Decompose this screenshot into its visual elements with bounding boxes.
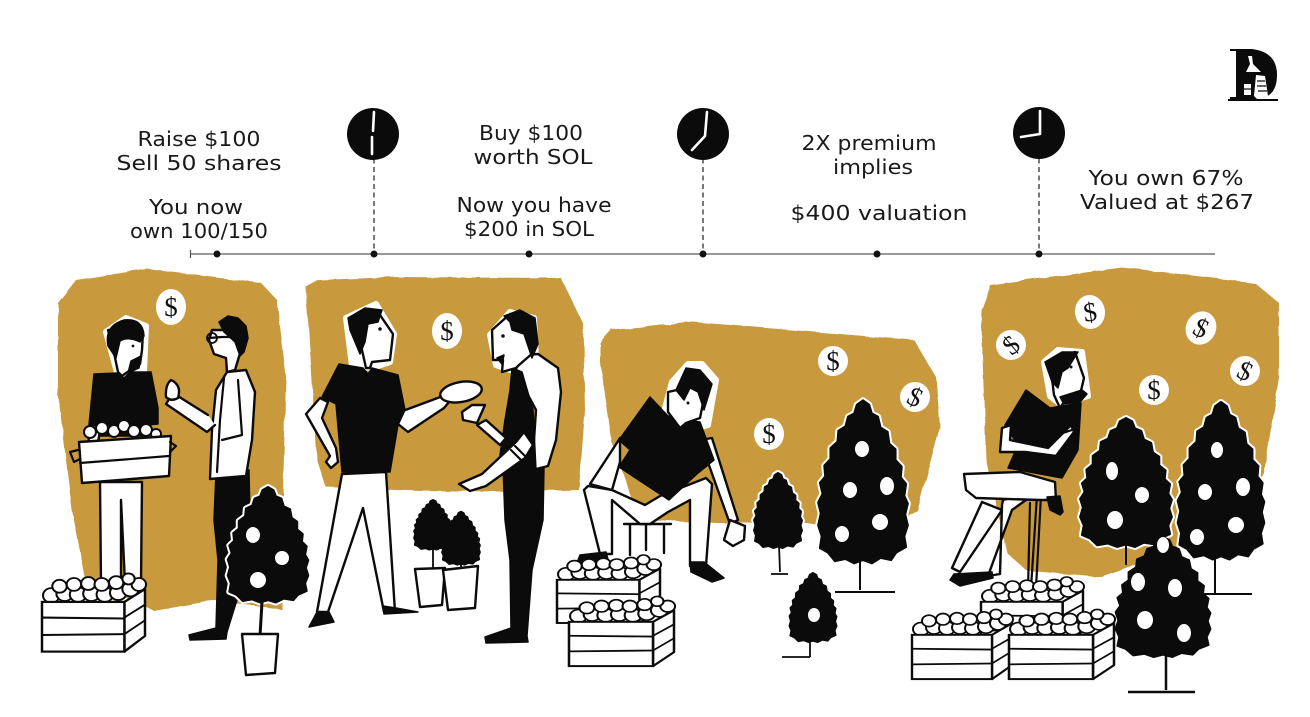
- icon: dollar bubble panel 3 left: [754, 418, 784, 450]
- crate: front left apples panel 4: [912, 609, 1013, 679]
- crate: apples next to panel 1: [42, 573, 146, 652]
- icon: dollar bubble panel 4 upper right: [1180, 306, 1222, 350]
- text: raise step: Raise $100: [138, 127, 260, 151]
- person: man holding crate: [70, 318, 176, 583]
- text: premium step: 2X premium: [802, 131, 936, 155]
- text: raise step: own 100/150: [130, 219, 268, 243]
- icon: dollar bubble panel 4 far right: [1225, 351, 1265, 391]
- text: ownership step: [1080, 166, 1254, 214]
- plant: potted fruit tree panel 1: [228, 487, 308, 675]
- icon: dollar bubble panel 4 left: $: [996, 329, 1026, 361]
- icon: dollar bubble panel 4 top: $: [1081, 296, 1099, 328]
- plant: two potted small trees: [414, 500, 480, 610]
- text: raise step: You now: [148, 195, 243, 219]
- plant: small fruit tree panel 3: [782, 573, 836, 657]
- plant: left fruit tree panel 4: [1080, 418, 1172, 565]
- icon: dollar bubble panel 4 far right: $: [1233, 355, 1257, 387]
- plant: sapling panel 3: [754, 473, 802, 574]
- icon: dollar bubble panel 3 right: $: [903, 381, 927, 413]
- text: premium step: implies: [833, 155, 913, 179]
- icon: dollar bubble panel 4 left: [990, 324, 1032, 366]
- icon: dollar bubble panel 4 top: [1073, 293, 1107, 331]
- text: ownership step: Valued at $267: [1080, 190, 1254, 214]
- crate: rear apples panel 3: [557, 555, 661, 623]
- panel: gold background 1: [58, 269, 286, 611]
- plant: large fruit tree panel 3: [818, 400, 908, 592]
- text: buy step: $200 in SOL: [464, 217, 595, 241]
- crate: rear apples panel 4: [981, 577, 1084, 645]
- icon: clock 1: [347, 108, 399, 160]
- icon: dollar bubble panel 3 top: $: [826, 346, 840, 376]
- text: buy step: worth SOL: [474, 145, 593, 169]
- icon: dollar bubble panel 3 left: $: [762, 419, 776, 449]
- icon: dollar bubble panel 3 top: [818, 346, 848, 376]
- panel: gold background 4: [981, 267, 1279, 577]
- text: raise step: Sell 50 shares: [116, 151, 282, 175]
- icon: dollar bubble panel 4 centre: [1139, 375, 1169, 405]
- plant: right fruit tree panel 4: [1178, 402, 1264, 594]
- text: buy step: Buy $100: [479, 121, 583, 145]
- icon: dollar bubble panel 1: $: [164, 292, 178, 322]
- person: relaxed man with crossed arms on stool: [950, 350, 1088, 590]
- icon: clock 2: [677, 108, 729, 160]
- crate: front apples panel 3: [569, 596, 675, 666]
- icon: dollar bubble panel 4 centre: $: [1147, 375, 1161, 405]
- person: seated man tending sapling: [576, 364, 745, 582]
- icon: clock 3: [1013, 107, 1065, 159]
- person: man with glasses inspecting mango: [166, 316, 255, 640]
- text: premium step: $400 valuation: [790, 201, 968, 225]
- text: buy step: [456, 121, 612, 241]
- icon: dollar bubble panel 3 right: [895, 377, 935, 417]
- icon: publisher logo: [1228, 49, 1278, 100]
- icon: dollar bubble panel 1: [156, 289, 186, 325]
- text: buy step: Now you have: [456, 193, 612, 217]
- icon: dollar bubble panel 2: $: [440, 316, 454, 346]
- icon: dollar bubble panel 4 upper right: $: [1189, 312, 1213, 344]
- plant: front fruit tree panel 4: [1116, 537, 1210, 692]
- text: raise step: [116, 127, 282, 243]
- panel: gold background 3: [600, 322, 940, 535]
- text: ownership step: You own 67%: [1087, 166, 1244, 190]
- person: man with plate and hand on hip: [306, 304, 483, 627]
- icon: dollar bubble panel 2: [432, 313, 462, 349]
- text: premium step: [790, 131, 968, 225]
- crate: front right apples panel 4: [1009, 609, 1115, 679]
- panel: gold background 2: [306, 277, 585, 492]
- person: man in apron holding tool: [459, 310, 561, 643]
- timeline: [190, 150, 1215, 258]
